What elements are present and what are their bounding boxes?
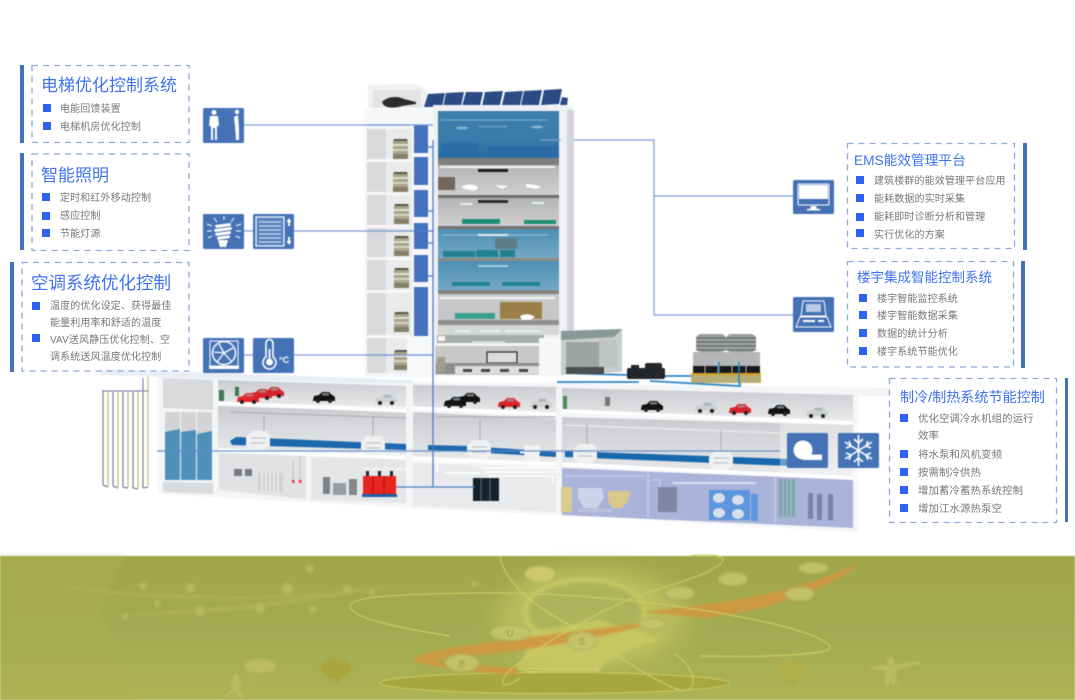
light wave and stars [50, 565, 477, 620]
panel: cooling and heating savings [888, 378, 1068, 524]
icon: snowflake [838, 433, 879, 468]
text: variable frequency: 将水泵和风机变频 [918, 450, 1002, 461]
text: efficient light source: 节能灯源 [60, 229, 100, 240]
panel: elevator optimization control system [20, 64, 190, 144]
ceiling hangers [230, 412, 721, 452]
text: chiller efficiency: 优化空调冷水机组的运行 [918, 414, 1034, 425]
panel: integrated building control [846, 260, 1025, 368]
heading: smart lighting: 智能照明 [41, 166, 109, 185]
light bulb with glow [477, 556, 707, 683]
water tanks [165, 412, 212, 480]
vertical riser and branch lines [157, 125, 780, 487]
text: river heat pump: 增加江水源热泵空 [918, 504, 1002, 515]
icon: thermometer [253, 338, 294, 373]
cooling tower [691, 334, 761, 384]
text: temperature setpoint: 温度的优化设定、获得最佳 [50, 301, 171, 312]
bottom decorative band [0, 555, 1075, 700]
icon: monitor [793, 180, 834, 214]
text: energy feedback: 电能回馈装置 [60, 104, 121, 115]
text: machine room: 电梯机房优化控制 [60, 122, 141, 133]
text: temperature setpoint line 2: 能量利用率和舒适的温度 [50, 318, 161, 329]
basement: main shell [100, 369, 890, 532]
panel: air conditioning optimization [10, 262, 190, 372]
elevator shaft blocks [414, 125, 428, 336]
roof machine room [368, 84, 428, 108]
heading: integrated control: 楼宇集成智能控制系统 [857, 270, 992, 285]
connector lines [244, 125, 793, 355]
connector between fan and thermometer [244, 354, 253, 356]
geothermal pipe field [102, 376, 148, 489]
heading: EMS: EMS能效管理平台 [854, 153, 966, 168]
middle section rooms [413, 385, 556, 512]
rooftop chiller unit [556, 360, 740, 386]
stair core [364, 109, 434, 378]
icon: blower [787, 433, 828, 468]
bottom decorative band: S [579, 637, 586, 648]
text: storage control: 增加蓄冷蓄热系统控制 [918, 486, 1023, 497]
orbit rings [350, 555, 830, 690]
text: statistics: 数据的统计分析 [877, 329, 948, 340]
text: diagnosis: 能耗即时诊断分析和管理 [874, 212, 985, 223]
icon: window blind [253, 214, 294, 249]
solar panels [424, 89, 568, 107]
air handling units [246, 431, 733, 470]
left section rooms [163, 378, 406, 503]
icon: thermometer: °C [279, 355, 290, 365]
blue air ducts [230, 437, 790, 466]
parked cars [219, 387, 828, 418]
text: sensing: 感应控制 [60, 211, 100, 222]
text: monitoring: 楼宇智能监控系统 [877, 294, 958, 305]
connector between lamp and blind [244, 230, 253, 232]
text: optimization plan: 实行优化的方案 [874, 230, 945, 241]
bottom decorative band: U [506, 629, 514, 640]
icon: fan [203, 338, 244, 373]
tower [364, 84, 622, 378]
translucent white overlay behind cooling icons [780, 422, 860, 477]
lavender plant room [561, 468, 853, 528]
panel: EMS platform [846, 142, 1027, 250]
platform disc [380, 672, 730, 694]
text: VAV control: VAV送风静压优化控制、空 [50, 335, 170, 346]
text: energy optimisation: 楼宇系统节能优化 [877, 347, 958, 358]
heading: elevator: 电梯优化控制系统 [41, 76, 177, 95]
text: VAV control line 2: 调系统送风温度优化控制 [50, 352, 161, 363]
figures [225, 657, 921, 698]
level slabs [218, 403, 853, 478]
icon: desktop terminal [793, 297, 834, 332]
electrical and mechanical equipment [234, 456, 499, 501]
panel: smart lighting [20, 153, 190, 252]
heading: cooling and heating: 制冷/制热系统节能控制 [900, 389, 1045, 405]
right section rooms [562, 388, 853, 477]
trees [321, 659, 807, 683]
text: platform application: 建筑楼群的能效管理平台应用 [874, 176, 1006, 187]
bottom decorative band: B [458, 659, 466, 670]
office frame [433, 105, 573, 345]
coin characters [445, 562, 828, 672]
orange swoosh [412, 561, 862, 675]
annex [561, 329, 622, 375]
heading: air conditioning: 空调系统优化控制 [31, 273, 171, 293]
text: data collection: 楼宇智能数据采集 [877, 311, 958, 322]
lobby [435, 338, 561, 376]
office floors [437, 111, 559, 343]
text: on-demand: 按需制冷供热 [918, 468, 981, 479]
text: chiller efficiency line 2: 效率 [918, 431, 939, 442]
icon: elevator [203, 108, 244, 143]
icon: energy-saving lamp [203, 214, 244, 249]
text: realtime collection: 能耗数据的实时采集 [874, 194, 965, 205]
text: timer and infrared: 定时和红外移动控制 [60, 193, 151, 204]
